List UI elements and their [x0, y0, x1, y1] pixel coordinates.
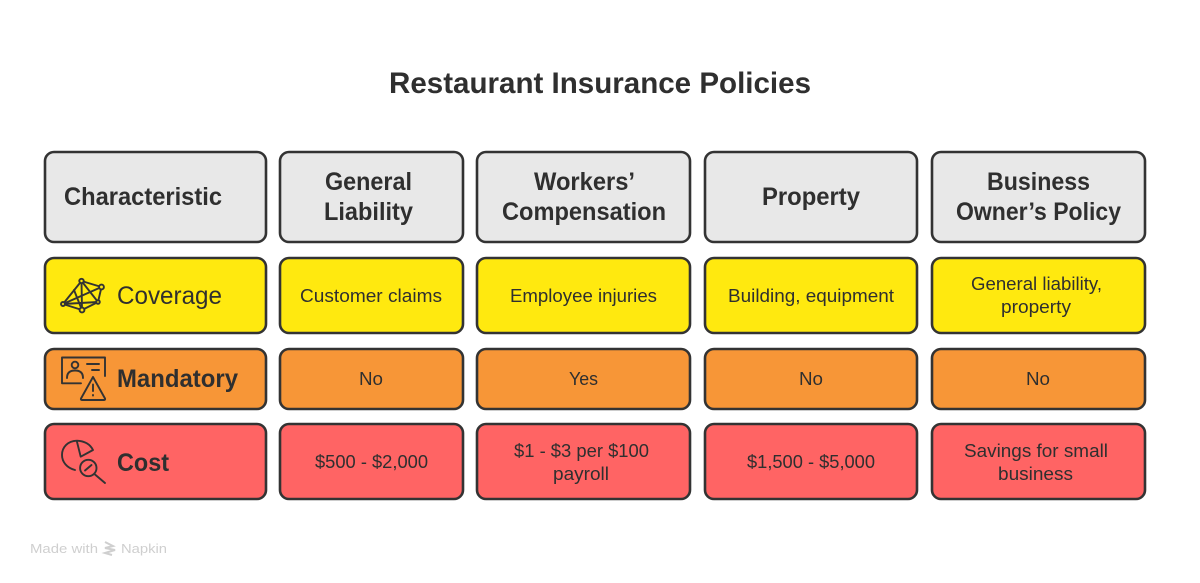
cell: Savings for small business [932, 424, 1145, 499]
cell: $1 - $3 per $100 payroll: payroll [553, 464, 609, 484]
row: Coverage [45, 258, 1145, 333]
label cell: Coverage [45, 258, 266, 333]
cell: No: No [1026, 369, 1050, 389]
cell: Building, equipment [705, 258, 917, 333]
cell: $1,500 - $5,000 [705, 424, 917, 499]
header: Workers' Compensation [477, 152, 690, 242]
label cell: Mandatory: Mandatory [117, 365, 238, 393]
cell: Yes [477, 349, 690, 409]
cell: Yes: Yes [569, 369, 598, 389]
footer: Made with Napkin: Napkin [121, 541, 167, 556]
footer: Made with Napkin: Made with [30, 541, 98, 556]
title: Restaurant Insurance Policies [389, 67, 811, 100]
cell: Customer claims: Customer claims [300, 286, 442, 306]
header: Business Owner's Policy: Business [987, 168, 1090, 196]
cell: $1,500 - $5,000: $1,500 - $5,000 [747, 452, 875, 472]
header row [45, 152, 1145, 242]
header: Workers' Compensation: Workers’ [534, 168, 635, 196]
cell: No [280, 349, 463, 409]
icon: ID card with warning [62, 358, 105, 400]
cell: No [932, 349, 1145, 409]
header: Business Owner's Policy [932, 152, 1145, 242]
cell: General liability, property: General liability, [971, 274, 1102, 294]
cell: General liability, property: property [1001, 297, 1071, 317]
cell: Employee injuries [477, 258, 690, 333]
label cell: Cost [45, 424, 266, 499]
cell: Customer claims [280, 258, 463, 333]
header: Workers' Compensation: Compensation [502, 198, 666, 226]
header: General Liability: Liability [324, 198, 413, 226]
cell: Savings for small business: business [998, 464, 1073, 484]
icon: pie chart with magnifier [62, 441, 105, 483]
row: Mandatory [45, 349, 1145, 409]
footer: Made with Napkin [30, 541, 167, 556]
cell: $500 - $2,000: $500 - $2,000 [315, 452, 428, 472]
header: Characteristic [45, 152, 266, 242]
header: Business Owner's Policy: Owner’s Policy [956, 198, 1121, 226]
cell: No: No [359, 369, 383, 389]
cell: Building, equipment: Building, equipment [728, 286, 894, 306]
header: Property [705, 152, 917, 242]
cell: No: No [799, 369, 823, 389]
label cell: Cost: Cost [117, 449, 170, 477]
cell: General liability, property [932, 258, 1145, 333]
cell: No [705, 349, 917, 409]
cell: $1 - $3 per $100 payroll [477, 424, 690, 499]
header: General Liability [280, 152, 463, 242]
header: Characteristic: Characteristic [64, 183, 222, 211]
cell: $500 - $2,000 [280, 424, 463, 499]
icon: Napkin logo [105, 542, 115, 555]
row: Cost [45, 424, 1145, 499]
cell: $1 - $3 per $100 payroll: $1 - $3 per $100 [514, 441, 649, 461]
label cell: Mandatory [45, 349, 266, 409]
header: General Liability: General [325, 168, 412, 196]
icon: network [61, 279, 104, 312]
cell: Savings for small business: Savings for small [964, 441, 1108, 461]
label cell: Coverage: Coverage [117, 282, 222, 310]
cell: Employee injuries: Employee injuries [510, 286, 657, 306]
header: Property: Property [762, 183, 860, 211]
